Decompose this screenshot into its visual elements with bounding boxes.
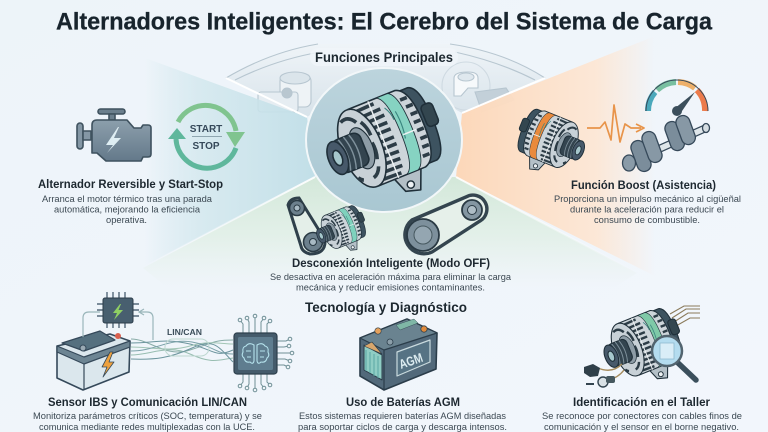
text: identificación en el taller: Se reconoce por conectores con cables finos de <box>542 411 742 422</box>
text: baterías AGM: Uso de Baterías AGM <box>346 395 460 409</box>
icon: alternador central <box>314 79 460 218</box>
panel: sector verde <box>143 177 637 290</box>
text: sensor IBS: Sensor IBS y Comunicación LIN/CAN <box>48 395 247 409</box>
heading: tecnología y diagnóstico: Tecnología y Diagnóstico <box>305 299 467 315</box>
label: LIN/CAN: LIN/CAN <box>167 327 202 337</box>
text: sensor IBS <box>33 395 262 432</box>
icon: batería AGM: AGM <box>397 350 425 372</box>
icon: ciclo start stop <box>168 105 245 168</box>
icon: alternador con correa desconectada <box>288 198 374 262</box>
text: función boost: Proporciona un impulso mecánico al cigüeñal <box>554 194 741 205</box>
text: sensor IBS: Monitoriza parámetros críticos (SOC, temperatura) y se <box>33 411 262 422</box>
text: función boost: durante la aceleración para reducir el <box>570 204 724 216</box>
text: función boost: Función Boost (Asistencia) <box>571 178 716 192</box>
title: Alternadores Inteligentes: El Cerebro del Sistema de Carga <box>56 8 713 36</box>
text: desconexión inteligente: Desconexión Inteligente (Modo OFF) <box>292 256 490 270</box>
text: alternador reversible: Alternador Reversible y Start-Stop <box>38 177 223 191</box>
icon: chip cerebro <box>234 314 294 392</box>
icon: ciclo start stop: STOP <box>192 141 220 152</box>
icon: cables finos <box>670 306 700 326</box>
text: alternador reversible <box>38 177 223 226</box>
text: alternador reversible: Arranca el motor térmico tras una parada <box>42 194 213 205</box>
círculo central <box>306 68 462 212</box>
separadores de sectores <box>143 78 637 273</box>
icon: poleas y correa <box>405 195 487 254</box>
icon: alternador de taller <box>595 303 694 397</box>
icon: cables LIN/CAN <box>131 339 233 362</box>
text: desconexión inteligente <box>270 256 512 294</box>
text: desconexión inteligente: Se desactiva en aceleración máxima para eliminar la carga <box>270 272 512 283</box>
icon: alternador boost <box>507 105 592 185</box>
panel: sector naranja <box>456 36 655 276</box>
icon: ciclo start stop: START <box>190 124 222 135</box>
text: función boost <box>554 178 741 226</box>
icon: cigüeñal <box>622 114 710 173</box>
panel: sector azul <box>142 58 315 267</box>
icon: batería con sensor IBS <box>57 331 130 390</box>
icon: lupa <box>652 336 696 380</box>
text: desconexión inteligente: mecánica y reducir emisiones contaminantes. <box>296 282 485 294</box>
icon: chip sensor <box>97 292 139 328</box>
icon: indicador velocímetro <box>646 80 708 116</box>
text: baterías AGM: Estos sistemas requieren baterías AGM diseñadas <box>299 411 506 422</box>
text: identificación en el taller <box>542 395 742 432</box>
icon: conectores <box>584 364 624 387</box>
flechas del sensor <box>83 309 153 340</box>
engine bay illustration <box>226 44 545 117</box>
heading: funciones principales: Funciones Principales <box>315 49 453 65</box>
icon: pulso naranja <box>587 105 644 142</box>
text: alternador reversible: automática, mejorando la eficiencia <box>54 204 201 216</box>
text: baterías AGM <box>298 395 507 432</box>
icon: batería AGM <box>360 319 437 390</box>
text: identificación en el taller: Identificación en el Taller <box>573 395 710 409</box>
text: alternador reversible: operativa. <box>106 215 147 226</box>
icon: motor con rayo <box>77 109 151 161</box>
text: función boost: consumo de combustible. <box>594 215 700 226</box>
